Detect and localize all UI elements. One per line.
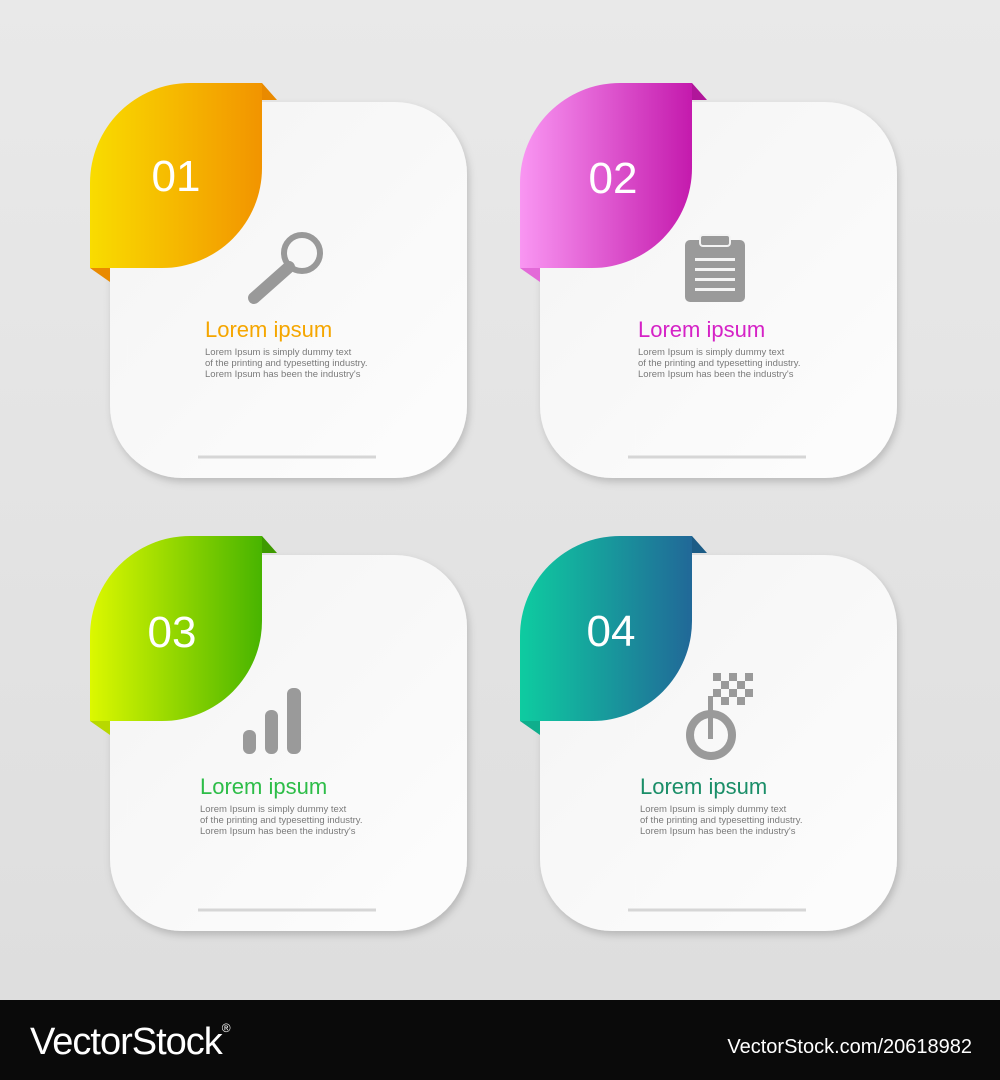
heading: lorem ipsum 02: Lorem ipsum xyxy=(638,317,765,342)
tab: 04: 04 xyxy=(587,607,635,656)
text block 03: Lorem Ipsum has been the industry's xyxy=(200,826,356,837)
text block 04: Lorem Ipsum is simply dummy text xyxy=(640,804,787,815)
panel: card 04 xyxy=(520,536,897,931)
footer url: VectorStock.com/20618982 xyxy=(727,1036,972,1058)
text block 03: Lorem Ipsum is simply dummy text xyxy=(200,804,347,815)
text block 04: Lorem Ipsum has been the industry's xyxy=(640,826,796,837)
footer logo: ® xyxy=(222,1021,231,1035)
text block 01: Lorem Ipsum has been the industry's xyxy=(205,369,361,380)
tab: 01 xyxy=(90,83,277,282)
icon: magnifier xyxy=(254,235,320,298)
text block 02: Lorem Ipsum is simply dummy text xyxy=(638,347,785,358)
footer bar xyxy=(0,1000,1000,1080)
tab: 03 xyxy=(90,536,277,735)
text block 02: of the printing and typesetting industry. xyxy=(638,358,800,369)
tab: 02 xyxy=(520,83,707,282)
panel: card 03 xyxy=(90,536,467,931)
tab: 04 xyxy=(520,536,707,735)
tab: 03: 03 xyxy=(148,608,196,657)
icon: bar chart xyxy=(243,688,301,754)
text block 04: of the printing and typesetting industry. xyxy=(640,815,802,826)
text block 01: Lorem Ipsum is simply dummy text xyxy=(205,347,352,358)
heading: lorem ipsum 01: Lorem ipsum xyxy=(205,317,332,342)
footer logo: VectorStock xyxy=(30,1021,222,1063)
heading: lorem ipsum 04: Lorem ipsum xyxy=(640,774,767,799)
text block 01: of the printing and typesetting industry. xyxy=(205,358,367,369)
tab: 02: 02 xyxy=(589,154,637,203)
heading: lorem ipsum 03: Lorem ipsum xyxy=(200,774,327,799)
text block 02: Lorem Ipsum has been the industry's xyxy=(638,369,794,380)
icon: target with flag xyxy=(690,673,753,756)
icon: clipboard xyxy=(685,235,745,302)
panel: card 01 xyxy=(90,83,467,478)
tab: 01: 01 xyxy=(152,152,200,201)
panel: card 02 xyxy=(520,83,897,478)
text block 03: of the printing and typesetting industry. xyxy=(200,815,362,826)
